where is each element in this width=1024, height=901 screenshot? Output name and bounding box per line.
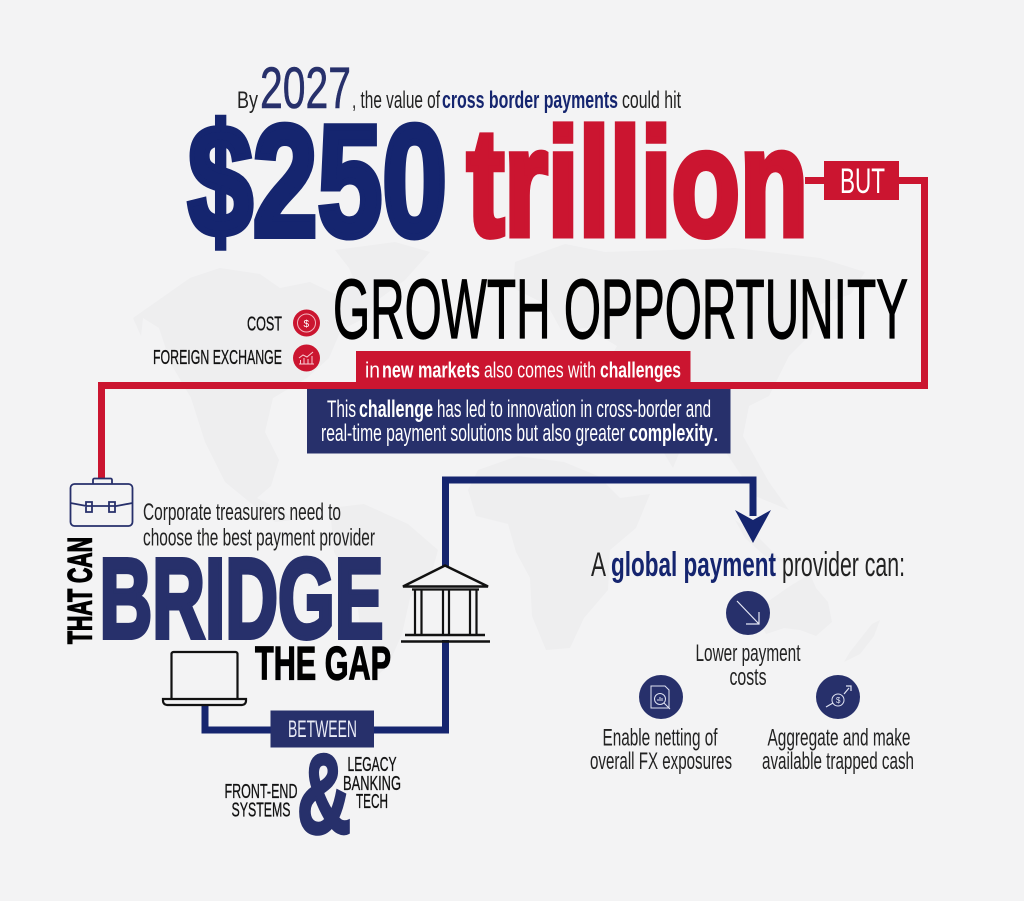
- intro sentence: 2027: [260, 56, 351, 121]
- cost label with icon: [247, 310, 320, 336]
- world map background: [133, 242, 880, 680]
- lower payment costs text: Lower payment: [696, 640, 801, 667]
- icon: trapped cash: $: [836, 696, 841, 705]
- trapped cash text: available trapped cash: [762, 748, 914, 775]
- icon: briefcase: [70, 478, 132, 526]
- navy text panel: This: [327, 396, 356, 423]
- intro sentence: , the value of: [352, 87, 440, 114]
- headline: $250 trillion: [188, 94, 808, 270]
- navy text panel: real-time payment solutions but also greater: [321, 420, 625, 447]
- legacy banking tech label: BANKING: [343, 773, 401, 795]
- red connector line: [102, 180, 924, 478]
- global payment provider heading: A: [591, 546, 606, 584]
- netting text: overall FX exposures: [590, 748, 732, 775]
- cost label with icon: $: [304, 319, 310, 330]
- headline: $250 trillion: trillion: [467, 98, 808, 268]
- global payment provider heading: global payment: [611, 546, 776, 584]
- front-end systems label: [224, 781, 298, 822]
- treasurers text: [143, 499, 375, 552]
- between label: [270, 710, 374, 748]
- red banner: also comes with: [484, 358, 596, 382]
- navy text panel: has led to innovation in cross-border and: [437, 396, 711, 423]
- foreign exchange label with icon: FOREIGN EXCHANGE: [153, 347, 282, 369]
- icon: trapped cash: [816, 675, 860, 719]
- navy text panel: challenge: [359, 396, 433, 423]
- navy text panel: complexity: [629, 420, 713, 447]
- netting text: [590, 724, 732, 775]
- lower payment costs text: costs: [730, 664, 766, 691]
- BUT label: BUT: [840, 162, 885, 201]
- foreign exchange label with icon: [153, 344, 320, 372]
- BRIDGE headline: BRIDGE: [100, 536, 384, 662]
- red banner: challenges: [600, 358, 681, 382]
- navy text panel: .: [712, 420, 719, 447]
- arrow head: [735, 510, 771, 543]
- lower payment costs text: [696, 640, 801, 691]
- legacy banking tech label: LEGACY: [348, 754, 396, 776]
- legacy banking tech label: [343, 754, 401, 813]
- icon: lower costs: [726, 591, 770, 635]
- intro sentence: could hit: [622, 87, 681, 114]
- front-end systems label: SYSTEMS: [232, 800, 290, 822]
- ampersand: &: [297, 731, 351, 857]
- global payment provider heading: provider can:: [782, 546, 905, 584]
- icon: laptop: [163, 652, 246, 705]
- red banner: new markets: [382, 358, 480, 382]
- headline: $250 trillion: $250: [188, 94, 447, 270]
- trapped cash text: [762, 724, 914, 775]
- BUT label: [824, 161, 899, 201]
- front-end systems label: FRONT-END: [224, 781, 298, 803]
- red banner: in: [365, 358, 380, 382]
- legacy banking tech label: TECH: [356, 791, 388, 813]
- intro sentence: [237, 56, 681, 121]
- red banner: [356, 351, 690, 388]
- between label: BETWEEN: [288, 716, 357, 743]
- icon: bank: [401, 566, 490, 642]
- treasurers text: choose the best payment provider: [143, 524, 375, 552]
- netting text: Enable netting of: [602, 724, 718, 752]
- the gap: THE GAP: [255, 636, 391, 690]
- navy connector line: [205, 480, 753, 730]
- cost label with icon: COST: [247, 314, 282, 336]
- trapped cash text: Aggregate and make: [768, 724, 910, 752]
- icon: netting document: [639, 675, 683, 719]
- intro sentence: cross border payments: [442, 87, 618, 114]
- treasurers text: Corporate treasurers need to: [143, 499, 341, 526]
- intro sentence: By: [237, 87, 258, 114]
- navy text panel: [307, 389, 730, 454]
- that can vertical text: THAT CAN: [62, 537, 100, 644]
